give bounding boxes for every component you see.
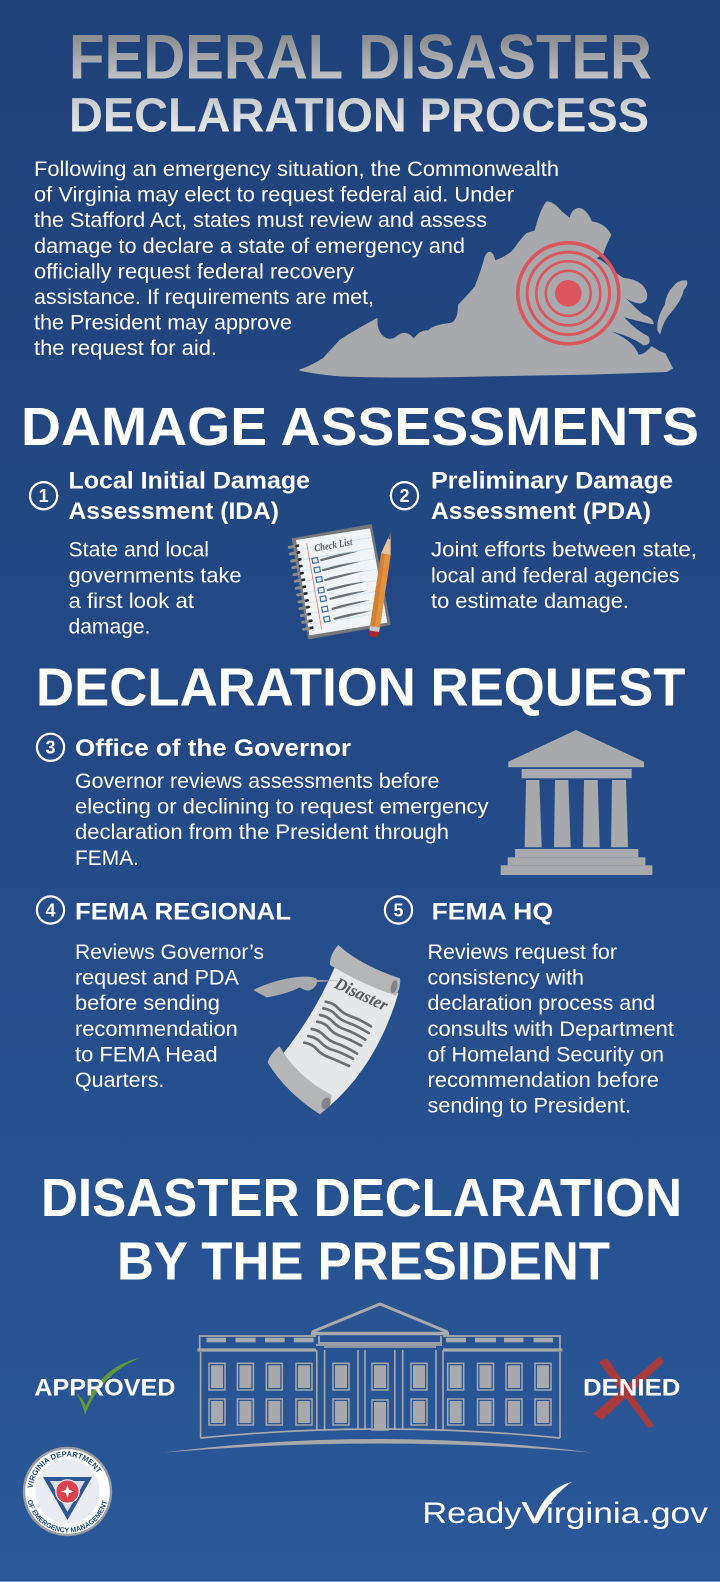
state outline <box>299 202 673 377</box>
denied with red cross <box>583 1356 680 1428</box>
step 3: office of the governor: declaration from the President through <box>75 821 449 844</box>
step 3: office of the governor: 3 <box>45 738 56 758</box>
emblem star <box>61 1485 74 1498</box>
denied with red cross: DENIED <box>583 1375 680 1402</box>
heading: disaster declaration by the president <box>41 1168 682 1291</box>
heading: declaration request: DECLARATION REQUEST <box>36 658 686 718</box>
top roll <box>330 945 400 996</box>
step 1: local initial damage assessment <box>30 468 310 638</box>
step 4: FEMA regional: request and PDA <box>75 967 239 990</box>
title: FEDERAL DISASTER <box>69 22 652 92</box>
intro text: the President may approve <box>34 312 292 335</box>
bottom roll <box>268 1046 332 1114</box>
step 5: FEMA HQ: consistency with <box>428 967 584 990</box>
intro text <box>34 158 559 360</box>
step 3: office of the governor: Governor reviews assessments before <box>75 770 439 793</box>
step 5: FEMA HQ: Reviews request for <box>428 941 617 964</box>
intro text: the Stafford Act, states must review and assess <box>34 209 487 232</box>
logo: ReadyVirginia.gov: .gov <box>641 1497 708 1530</box>
step 5: FEMA HQ: 5 <box>393 900 404 920</box>
intro text: assistance. If requirements are met, <box>34 286 374 309</box>
heading: disaster declaration by the president: BY THE PRESIDENT <box>117 1231 610 1291</box>
step 5: FEMA HQ: recommendation before <box>428 1069 659 1092</box>
step 4: FEMA regional: Reviews Governor’s <box>75 941 264 964</box>
step 2: preliminary damage assessment: to estimate damage. <box>431 590 629 613</box>
step 3: office of the governor: Office of the Governor <box>75 735 351 762</box>
approved with green check <box>34 1358 175 1415</box>
logo: ReadyVirginia.gov <box>422 1482 708 1530</box>
logo: Virginia Department of Emergency Management <box>22 1446 112 1536</box>
logo: Virginia Department of Emergency Management: OF EMERGENCY MANAGEMENT <box>28 1500 107 1532</box>
scribbled list lines <box>320 551 372 620</box>
step 1: local initial damage assessment: damage. <box>68 616 150 638</box>
step 2: preliminary damage assessment: Joint efforts between state, <box>431 539 697 562</box>
check list title: Check List <box>314 537 354 555</box>
step 4: FEMA regional: to FEMA Head <box>75 1043 218 1066</box>
step 4: FEMA regional: 4 <box>45 900 56 920</box>
quill feather <box>253 977 340 997</box>
writing lines <box>304 1002 371 1066</box>
step 4: FEMA regional: Quarters. <box>75 1069 164 1092</box>
pencil <box>381 533 391 555</box>
eastern shore <box>658 281 687 334</box>
step 1: local initial damage assessment: Local Initial Damage <box>68 468 310 495</box>
title: DECLARATION PROCESS <box>69 90 649 143</box>
step 2: preliminary damage assessment: 2 <box>399 486 410 506</box>
heading: disaster declaration by the president: DISASTER DECLARATION <box>41 1168 682 1228</box>
icon: government building <box>501 730 652 875</box>
icon: scroll and quill <box>253 945 400 1114</box>
disaster script: Disaster <box>331 973 391 1015</box>
icon: checklist and pencil <box>289 524 391 639</box>
step 5: FEMA HQ: sending to President. <box>428 1095 631 1118</box>
bottom edge strip <box>0 1581 720 1582</box>
step 5: FEMA HQ <box>385 896 674 1118</box>
step 2: preliminary damage assessment <box>391 468 697 613</box>
step 1: local initial damage assessment: 1 <box>39 486 49 506</box>
intro text: the request for aid. <box>34 337 217 360</box>
approved with green check: APPROVED <box>34 1375 175 1402</box>
title <box>69 22 652 143</box>
icon: white house <box>164 1304 592 1452</box>
balustrade <box>207 1338 553 1342</box>
step 5: FEMA HQ: declaration process and <box>428 992 655 1015</box>
target rings <box>518 243 619 344</box>
step 1: local initial damage assessment: governments take <box>68 564 242 587</box>
step 3: office of the governor: electing or declining to request emergency <box>75 796 489 819</box>
step 5: FEMA HQ: FEMA HQ <box>432 898 553 925</box>
step 5: FEMA HQ: consults with Department <box>428 1018 674 1041</box>
check boxes <box>312 558 330 622</box>
lawn curve <box>164 1439 592 1452</box>
step 3: office of the governor: FEMA. <box>75 847 139 870</box>
heading: damage assessments: DAMAGE ASSESSMENTS <box>21 397 699 457</box>
logo: ReadyVirginia.gov: irginia <box>546 1497 641 1530</box>
logo: ReadyVirginia.gov: V <box>522 1497 548 1530</box>
window panes <box>211 1365 549 1430</box>
step 1: local initial damage assessment: a first look at <box>68 590 194 613</box>
step 4: FEMA regional: recommendation <box>75 1018 238 1041</box>
intro text: damage to declare a state of emergency and <box>34 235 465 258</box>
intro text: officially request federal recovery <box>34 260 355 283</box>
intro text: Following an emergency situation, the Commonwealth <box>34 158 559 181</box>
step 5: FEMA HQ: of Homeland Security on <box>428 1043 664 1066</box>
step 1: local initial damage assessment: State and local <box>68 539 209 562</box>
paper <box>283 967 398 1114</box>
logo: ReadyVirginia.gov: Ready <box>422 1497 521 1530</box>
step 4: FEMA regional: FEMA REGIONAL <box>75 898 291 925</box>
step 2: preliminary damage assessment: Preliminary Damage <box>431 468 673 495</box>
step 2: preliminary damage assessment: local and federal agencies <box>431 564 680 587</box>
step 3: office of the governor <box>37 734 489 870</box>
step 4: FEMA regional <box>37 896 291 1092</box>
spiral rings <box>289 546 312 629</box>
icon: Virginia map with target <box>299 202 687 377</box>
window frames <box>209 1363 551 1430</box>
step 2: preliminary damage assessment: Assessment (PDA) <box>431 498 651 525</box>
step 1: local initial damage assessment: Assessment (IDA) <box>68 498 279 525</box>
seal text: VIRGINIA DEPARTMENT <box>27 1451 102 1488</box>
intro text: of Virginia may elect to request federal aid. Under <box>34 184 514 207</box>
step 4: FEMA regional: before sending <box>75 992 220 1015</box>
